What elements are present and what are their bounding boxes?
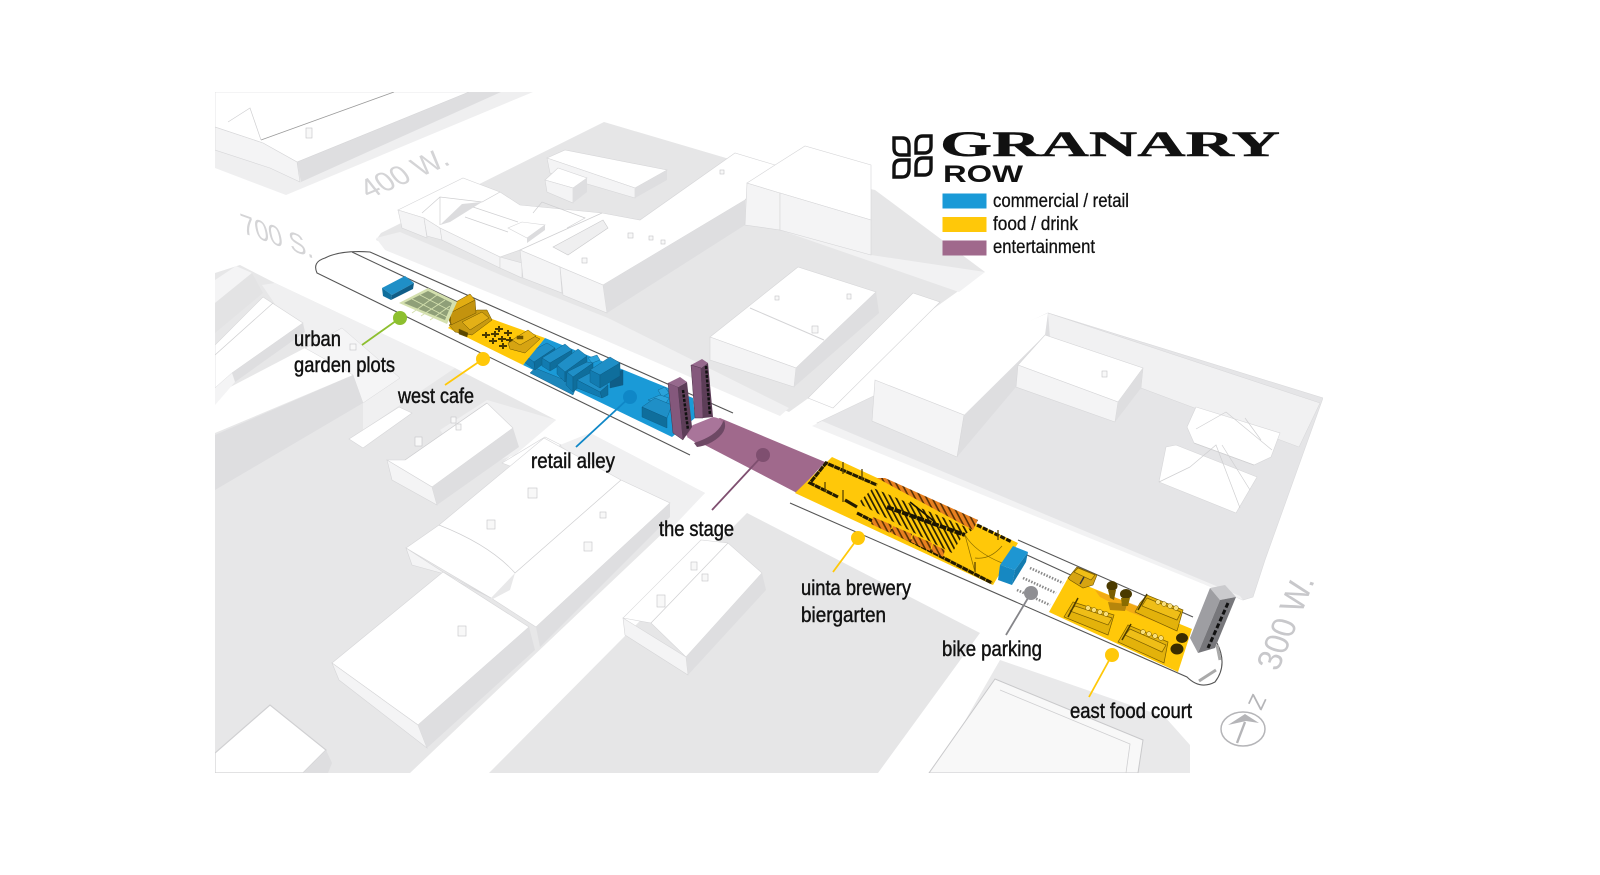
food truck (447, 294, 492, 337)
building: long central sheds (332, 438, 670, 748)
pad building (710, 267, 876, 368)
monument towers (668, 359, 725, 447)
callout: uinta brewery biergarten: uinta brewery (801, 577, 911, 600)
block: north-east (812, 313, 1323, 600)
callout: west cafe: west cafe (397, 385, 474, 408)
block: north-centre warehouses (376, 122, 985, 416)
legend: food / drink: food / drink (993, 214, 1078, 235)
base map (215, 92, 1323, 773)
food truck small (1068, 567, 1097, 588)
retail units (524, 343, 672, 428)
callout: the stage: the stage (659, 518, 734, 541)
callout: urban garden plots: urban (294, 328, 341, 351)
north arrow: Z (1243, 690, 1271, 713)
callout: east food court (1070, 648, 1192, 723)
food truck A (1064, 598, 1114, 635)
zone: east food court (1049, 567, 1192, 672)
legend: commercial / retail: commercial / retail (993, 191, 1129, 212)
callout: west cafe (397, 352, 490, 408)
logo wordmark: GRANARY: GRANARY (940, 124, 1280, 164)
east tall building (745, 183, 780, 230)
callout: the stage (659, 448, 770, 541)
food truck B (1135, 594, 1183, 631)
callout: bike parking (942, 586, 1042, 661)
food truck C (1118, 624, 1168, 663)
logo icon (894, 136, 931, 177)
promenade outline (316, 252, 1222, 685)
cafe tables (482, 326, 514, 349)
legend: entertainment: entertainment (993, 237, 1096, 258)
houses: east (1159, 407, 1280, 513)
callout: retail alley: retail alley (531, 450, 615, 473)
bike racks (1017, 568, 1063, 605)
biergarten fence (810, 463, 1012, 583)
zone: retail alley (523, 338, 695, 437)
road labels (238, 144, 1323, 674)
block: north-west corner (215, 92, 533, 195)
callout: urban garden plots (294, 311, 407, 377)
zone: uinta brewery biergarten (795, 457, 1018, 585)
legend: food / drink (942, 214, 1078, 235)
biergarten hatched decks (858, 488, 973, 553)
west houses (215, 266, 252, 303)
block: south-centre (489, 513, 980, 773)
cafe kiosk (508, 330, 540, 353)
zone: west cafe (447, 294, 545, 365)
road label: 300 W.: 300 W. (1249, 571, 1323, 674)
callout: uinta brewery biergarten: biergarten (801, 604, 886, 627)
callout: bike parking: bike parking (942, 638, 1042, 661)
road label: 700 S.: 700 S. (238, 208, 316, 266)
tables and bins (1106, 581, 1188, 654)
block: south-west (215, 265, 705, 773)
back building (547, 150, 667, 188)
unit: west retail container (382, 276, 414, 300)
logo wordmark: ROW: ROW (943, 161, 1023, 188)
zone: the stage (676, 418, 825, 493)
building: south-west corner (215, 705, 332, 773)
zone: urban garden plots (399, 288, 457, 324)
building: small gabled house (387, 403, 519, 505)
callout: retail alley (531, 390, 637, 473)
block: south-east (929, 660, 1190, 773)
callout: urban garden plots: garden plots (294, 354, 395, 377)
east monument tower (1190, 585, 1236, 681)
legend: entertainment (942, 237, 1096, 258)
cluster roofs (398, 153, 775, 285)
callout: east food court: east food court (1070, 700, 1192, 723)
legend: commercial / retail (942, 191, 1129, 212)
unit: biergarten container (998, 546, 1028, 585)
road label: 400 W.: 400 W. (353, 144, 456, 204)
podium (687, 417, 725, 447)
white shed roof (215, 348, 353, 433)
north arrow (1221, 690, 1271, 746)
legend and logo (894, 124, 1280, 258)
callout: uinta brewery biergarten (801, 531, 911, 627)
tent (965, 535, 1002, 572)
